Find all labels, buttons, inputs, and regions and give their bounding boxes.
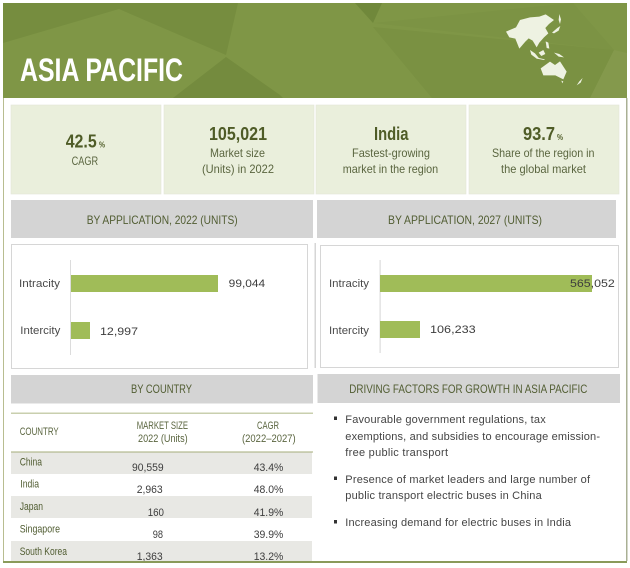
bar: intracity 2027 (380, 275, 592, 292)
icon: Asia Pacific map (506, 14, 583, 85)
bar chart: 2022: 12,997 (100, 326, 138, 338)
bar: intracity 2022 (71, 275, 218, 292)
bar chart: 2027: 106,233 (430, 324, 476, 336)
heading: by application 2027: BY APPLICATION, 2027 (UNITS) (388, 213, 542, 227)
bottom border (0, 561, 630, 568)
panel: KPI global share: 93.7 (523, 124, 555, 144)
panel: KPI CAGR: CAGR (72, 154, 98, 168)
table: by country: 90,559 (132, 462, 164, 474)
heading: by application 2027 (317, 200, 616, 238)
bar chart: 2022: 99,044 (229, 278, 265, 290)
panel: KPI global share: the global market (501, 162, 587, 176)
heading: by country: BY COUNTRY (131, 382, 192, 396)
bar chart: 2027: Intracity (329, 278, 370, 290)
table: by country: 39.9% (254, 529, 283, 541)
table: by country: 2022 (Units) (138, 433, 188, 445)
bullet list: driving factors: free public transport (345, 447, 448, 459)
panel: KPI fastest growing: India (374, 124, 409, 144)
table: by country: COUNTRY (20, 426, 59, 438)
panel: KPI global share (469, 105, 619, 194)
table: by country: (2022–2027) (242, 433, 296, 445)
panel: KPI market size: (Units) in 2022 (202, 162, 274, 176)
bar chart: 2027: 565,052 (570, 278, 615, 290)
panel: KPI fastest growing: Fastest-growing (352, 146, 430, 160)
table: by country: 1,363 (137, 551, 163, 563)
table: by country: 98 (153, 529, 163, 541)
header banner (3, 3, 627, 98)
bar: intercity 2022 (71, 322, 90, 339)
table: by country (11, 412, 313, 563)
heading: by application 2022 (11, 200, 313, 238)
table: by country: 43.4% (254, 462, 283, 474)
title: ASIA PACIFIC (20, 52, 183, 88)
table: by country: 160 (148, 507, 164, 519)
panel: KPI CAGR (11, 105, 161, 194)
panel: KPI market size (164, 105, 314, 194)
bullet list: driving factors: exemptions, and subsidies to encourage emission- (345, 431, 600, 443)
bar chart: 2022 (12, 244, 308, 368)
bullet list: driving factors (334, 414, 600, 529)
table: by country: 41.9% (254, 507, 283, 519)
panel: KPI market size: Market size (210, 146, 265, 160)
divider between charts (314, 243, 316, 368)
table: by country: South Korea (20, 546, 68, 558)
bullet list: driving factors: Increasing demand for electric buses in India (345, 517, 572, 529)
bar chart: 2027: Intercity (329, 325, 370, 337)
table: by country: India (20, 479, 40, 491)
table: by country: Japan (20, 501, 43, 513)
bar chart: 2027 (320, 246, 618, 368)
bullet list: driving factors: public transport electric buses in China (345, 490, 543, 502)
bullet list: driving factors: Favourable government regulations, tax (345, 414, 546, 426)
table: by country: CAGR (257, 420, 279, 432)
table: by country: 2,963 (137, 484, 163, 496)
bar chart: 2022: Intracity (19, 278, 61, 290)
table: by country: 48.0% (254, 484, 283, 496)
panel: KPI CAGR: 42.5 (66, 132, 97, 152)
bar: intercity 2027 (380, 321, 420, 338)
heading: by country (11, 375, 313, 404)
bar chart: 2022: Intercity (20, 325, 61, 337)
table: by country: 13.2% (254, 551, 283, 563)
table: by country: China (20, 457, 43, 469)
panel: KPI global share: Share of the region in (492, 146, 594, 160)
table: by country: MARKET SIZE (137, 420, 188, 432)
panel: KPI CAGR: % (99, 140, 105, 150)
heading: by application 2022: BY APPLICATION, 2022 (UNITS) (87, 213, 238, 227)
panel: KPI global share: % (557, 133, 563, 142)
panel: KPI market size: 105,021 (209, 124, 267, 144)
panel: KPI fastest growing (316, 105, 466, 194)
heading: driving factors (318, 374, 620, 403)
bullet list: driving factors: Presence of market leaders and large number of (345, 474, 591, 486)
table: by country: Singapore (20, 524, 60, 536)
panel: KPI fastest growing: market in the region (343, 162, 438, 176)
